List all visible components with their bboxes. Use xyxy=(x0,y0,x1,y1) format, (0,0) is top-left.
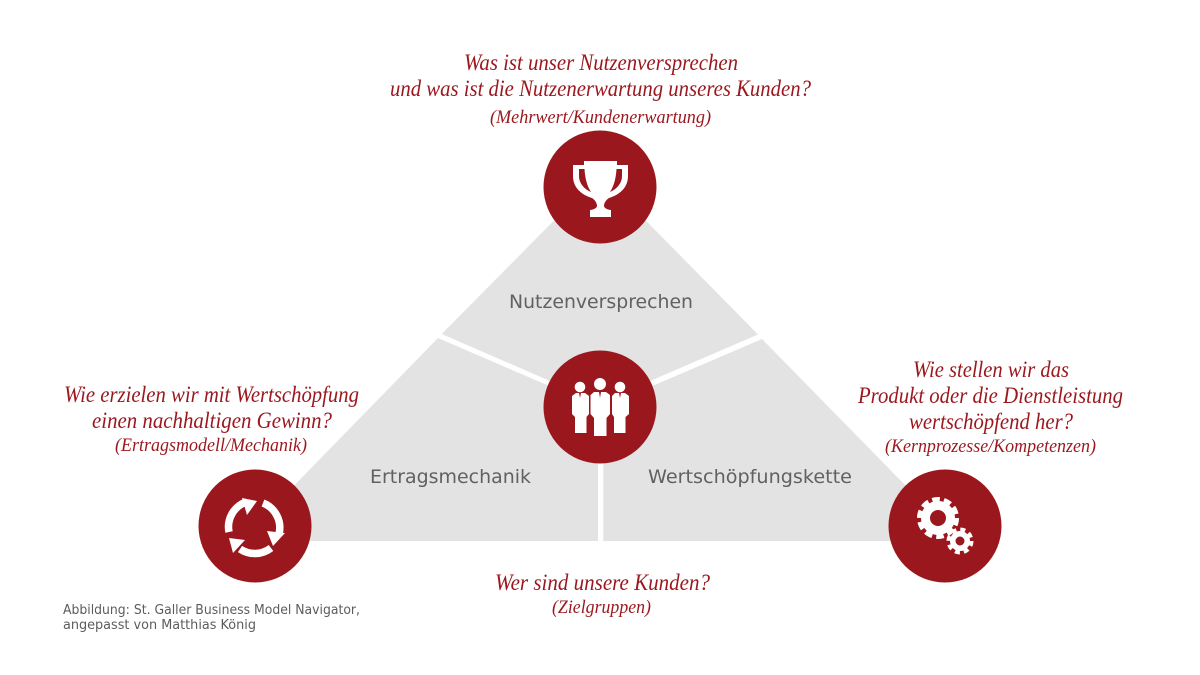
question: Wertschöpfungskette: wertschöpfend her? xyxy=(909,409,1073,434)
icon: gears xyxy=(888,470,1002,582)
icon: circular arrows xyxy=(198,470,312,582)
triangle segment: Nutzenversprechen xyxy=(442,174,758,381)
question: Wertschöpfungskette: (Kernprozesse/Kompetenzen) xyxy=(885,436,1096,457)
icon: trophy xyxy=(544,130,656,244)
label: Ertragsmechanik: Ertragsmechanik xyxy=(370,466,531,488)
question: Zielgruppen xyxy=(495,570,710,618)
question: Nutzenversprechen xyxy=(390,50,811,128)
question: Zielgruppen: Wer sind unsere Kunden? xyxy=(495,570,710,595)
triangle segment: Ertragsmechanik xyxy=(240,338,598,541)
triangle segment: Wertschöpfungskette xyxy=(603,339,960,541)
question: Ertragsmechanik: (Ertragsmodell/Mechanik) xyxy=(115,435,307,456)
question: Ertragsmechanik xyxy=(64,382,359,456)
question: Wertschöpfungskette: Produkt oder die Dienstleistung xyxy=(857,383,1123,408)
question: Wertschöpfungskette: Wie stellen wir das xyxy=(913,357,1069,382)
question: Nutzenversprechen: (Mehrwert/Kundenerwartung) xyxy=(490,107,711,128)
question: Ertragsmechanik: Wie erzielen wir mit Wertschöpfung xyxy=(64,382,359,407)
question: Nutzenversprechen: Was ist unser Nutzenversprechen xyxy=(464,50,738,75)
source caption: angepasst von Matthias König xyxy=(63,618,256,633)
question: Wertschöpfungskette xyxy=(857,357,1123,457)
source caption xyxy=(63,603,360,633)
icon: people group xyxy=(544,350,656,464)
source caption: Abbildung: St. Galler Business Model Navigator, xyxy=(63,603,360,618)
label: Wertschöpfungskette: Wertschöpfungskette xyxy=(648,466,852,488)
question: Ertragsmechanik: einen nachhaltigen Gewinn? xyxy=(92,408,332,433)
triangle diagram xyxy=(240,174,960,541)
question: Nutzenversprechen: und was ist die Nutzenerwartung unseres Kunden? xyxy=(390,76,811,101)
label: Nutzenversprechen: Nutzenversprechen xyxy=(509,291,693,313)
question: Zielgruppen: (Zielgruppen) xyxy=(552,597,651,618)
